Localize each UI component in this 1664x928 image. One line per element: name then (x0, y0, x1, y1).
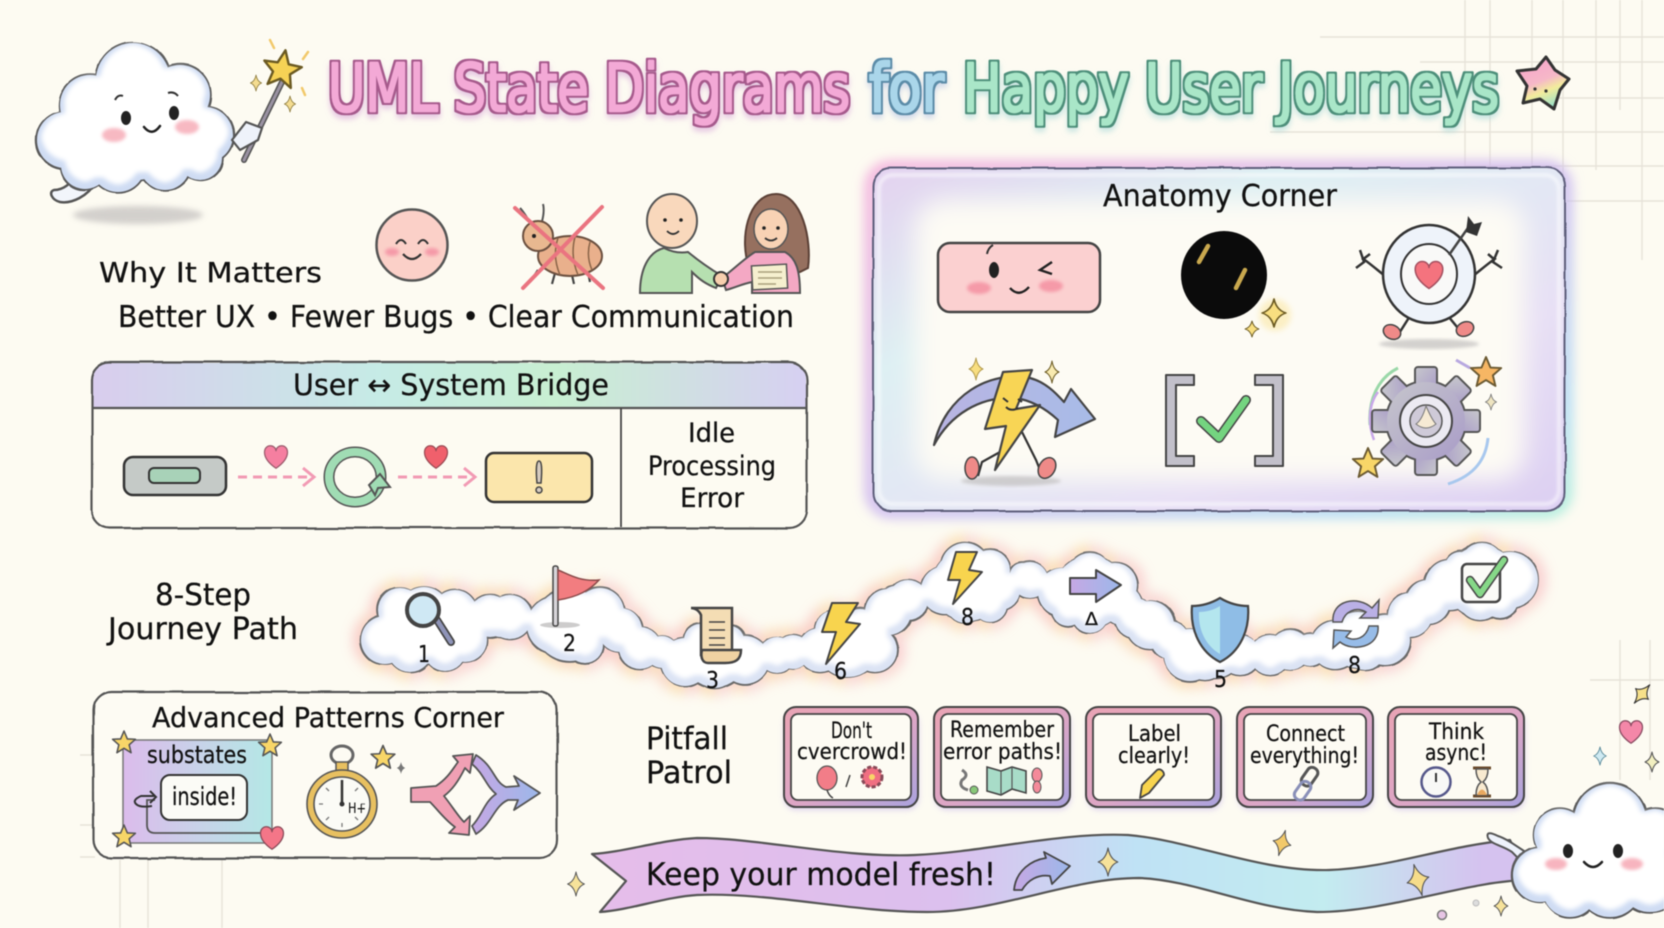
state labels: Processing (648, 451, 776, 482)
magic wand (232, 40, 308, 160)
panel: advanced patterns corner (93, 692, 557, 858)
banner: keep your model fresh (568, 828, 1530, 920)
icon: walking lightning transition (934, 358, 1095, 486)
cloud face (102, 92, 199, 142)
card: remember error paths: Remember (950, 718, 1055, 743)
step 1: magnifier (407, 594, 451, 668)
substates box: inside! (172, 782, 237, 811)
pitfall cards (784, 707, 1525, 810)
step 8: refresh (1333, 600, 1379, 679)
cloud body (37, 43, 233, 192)
card: don't overcrowd (784, 707, 919, 810)
card: connect everything: Connect (1266, 722, 1345, 747)
state labels: Error (680, 483, 745, 514)
bridge heading: User ↔ System Bridge (293, 368, 609, 402)
icon: final state target (1356, 216, 1502, 349)
icon: gear with stars (1353, 357, 1501, 484)
title: for: for (869, 50, 945, 127)
panel heading: Anatomy Corner (1103, 179, 1338, 214)
stopwatch (307, 746, 405, 838)
icon: two people shaking hands (640, 194, 809, 293)
step 4: lightning bolt: 6 (834, 659, 847, 685)
heading: 8-step journey path: 8-Step (155, 578, 251, 613)
substates box (113, 731, 283, 849)
card: connect everything: everything! (1250, 744, 1359, 769)
panel: anatomy corner (871, 167, 1566, 512)
finish: checkbox (1462, 560, 1504, 602)
mascot: cloud bottom right (1487, 679, 1664, 917)
processing state ring (329, 452, 390, 502)
icon: initial state black ball (1181, 231, 1291, 337)
fork and join arrows (411, 754, 540, 835)
panel: user system bridge (92, 362, 807, 528)
title: Happy User Journeys: Happy User Journeys (963, 50, 1499, 127)
trail glow (361, 543, 1538, 688)
card: label clearly: Label (1128, 722, 1181, 747)
card: think async: async! (1425, 741, 1487, 766)
heading: 8-step journey path: Journey Path (106, 612, 298, 647)
step 8: refresh: 8 (1348, 653, 1361, 679)
advanced frame (93, 692, 557, 858)
icon: curved arrow (1014, 852, 1070, 890)
card: think async (1388, 707, 1525, 810)
step 5: lightning bolt (948, 552, 982, 631)
state labels (648, 418, 776, 514)
card: connect everything (1237, 707, 1374, 810)
banner text: Keep your model fresh! (646, 857, 996, 893)
floating decorations (1594, 679, 1659, 772)
step 6: arrow (1070, 570, 1121, 630)
icon: guard condition brackets (1166, 375, 1283, 466)
icon: winking pink state (938, 243, 1100, 312)
why it matters (99, 194, 809, 335)
card: think async: Think (1428, 720, 1484, 745)
title: UML State Diagrams: UML State Diagrams (328, 50, 850, 127)
cloud face (1545, 844, 1643, 870)
advanced heading: Advanced Patterns Corner (152, 701, 504, 734)
transition arrow two (398, 446, 475, 486)
heading: pitfall patrol: Pitfall (646, 721, 728, 757)
ribbon (592, 835, 1530, 912)
bridge frame (92, 362, 807, 528)
substates box: substates (147, 741, 247, 769)
cloud shadow (73, 206, 203, 224)
title (328, 50, 1499, 127)
card: don't overcrowd: cvercrowd! (797, 740, 907, 765)
bridge header bar (93, 363, 806, 408)
journey path cloud trail (361, 543, 1538, 694)
card: remember error paths: error paths! (943, 740, 1062, 765)
step 2: flag (540, 566, 599, 657)
cloud left arm (51, 170, 96, 202)
ribbon sparkles (568, 828, 1508, 920)
idle state (124, 457, 226, 495)
panel frame (871, 167, 1566, 512)
card: don't overcrowd: Don't (831, 719, 872, 744)
card: label clearly: clearly! (1118, 744, 1190, 769)
heading: why it matters: Why It Matters (99, 256, 322, 289)
card: remember error paths (934, 707, 1071, 810)
step 7: shield: 5 (1214, 667, 1227, 693)
trail clouds (361, 543, 1538, 688)
pointing arm (1487, 833, 1530, 866)
step 4: lightning bolt (822, 603, 860, 685)
step 3: scroll: 3 (706, 668, 719, 694)
step 1: magnifier: 1 (418, 642, 430, 668)
benefits line: Better UX • Fewer Bugs • Clear Communication (118, 300, 794, 335)
step 3: scroll (691, 608, 741, 694)
step 6: arrow: Δ (1085, 609, 1099, 630)
icon: smiling face (376, 210, 448, 280)
heading: pitfall patrol (646, 721, 732, 791)
step 7: shield (1192, 598, 1248, 693)
cloud body (1513, 784, 1664, 917)
stopwatch: H+ (348, 801, 366, 817)
heading: pitfall patrol: Patrol (646, 755, 732, 791)
card: label clearly (1086, 707, 1222, 810)
icon: rainbow star (1517, 57, 1569, 109)
error state (486, 453, 592, 502)
step 2: flag: 2 (563, 631, 576, 657)
state labels: Idle (688, 418, 735, 449)
mascot: cloud with magic wand (37, 40, 308, 224)
step 5: lightning bolt: 8 (961, 605, 974, 631)
heading: 8-step journey path (106, 578, 298, 647)
icon: crossed out bug (515, 204, 603, 288)
transition arrow one (238, 446, 314, 486)
